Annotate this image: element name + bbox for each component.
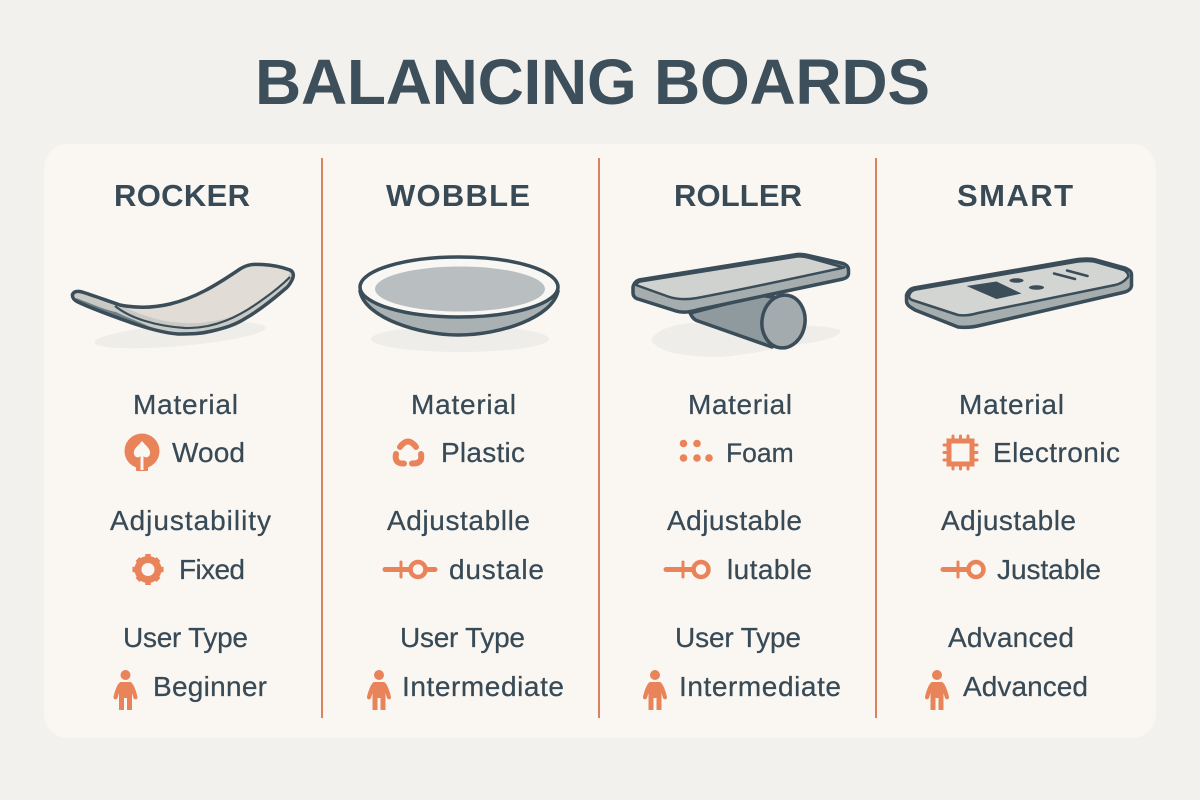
value: intermediate: Intermediate — [679, 671, 841, 702]
value: justable: Justable — [997, 554, 1101, 585]
value: fixed: Fixed — [179, 554, 245, 585]
value: foam: Foam — [726, 438, 794, 468]
icon: recycle — [396, 442, 421, 464]
label: adjustability: Adjustability — [110, 505, 271, 536]
panel: rocker column — [72, 178, 293, 710]
label: material: Material — [133, 389, 238, 420]
value: beginner: Beginner — [153, 671, 267, 702]
heading: wobble: WOBBLE — [386, 178, 530, 213]
icon: chip — [944, 436, 977, 469]
icon: slider — [666, 562, 708, 577]
heading: roller: ROLLER — [674, 178, 802, 213]
icon: gear — [132, 554, 164, 585]
panel: comparison card — [44, 144, 1156, 738]
label: material: Material — [411, 389, 516, 420]
label: user type: User Type — [400, 622, 525, 653]
heading: rocker: ROCKER — [114, 178, 250, 213]
value: lutable: lutable — [727, 554, 812, 585]
label: material: Material — [688, 389, 792, 420]
icon: foam dots — [680, 440, 713, 462]
icon: person — [367, 670, 391, 710]
label: user type: User Type — [123, 622, 248, 653]
panel: smart column — [906, 178, 1132, 710]
icon: person — [925, 670, 949, 710]
label: user type: User Type — [675, 622, 801, 653]
icon: person — [643, 670, 667, 710]
illustration: wobble board — [360, 257, 558, 352]
value: wood: Wood — [172, 437, 245, 468]
value: advanced: Advanced — [963, 671, 1088, 702]
icon: wood — [124, 434, 160, 471]
value: intermediate: Intermediate — [402, 671, 564, 702]
panel: roller column — [633, 178, 848, 710]
heading: smart: SMART — [957, 178, 1073, 213]
icon: slider — [385, 562, 435, 577]
label: material: Material — [959, 389, 1064, 420]
label: adjustable: Adjustablle — [387, 505, 530, 536]
label: adjustable: Adjustable — [941, 505, 1076, 536]
icon: person — [114, 670, 138, 710]
illustration: roller board — [633, 254, 848, 357]
value: electronic: Electronic — [993, 437, 1120, 468]
label: adjustable: Adjustable — [667, 505, 802, 536]
illustration: smart board — [906, 259, 1132, 327]
illustration: rocker board — [72, 264, 293, 353]
value: dustale: dustale — [449, 554, 544, 585]
label: advanced: Advanced — [948, 622, 1074, 653]
value: plastic: Plastic — [441, 437, 525, 468]
icon: slider — [943, 562, 984, 577]
panel: wobble column — [360, 178, 564, 710]
title: BALANCING BOARDS — [255, 46, 930, 118]
